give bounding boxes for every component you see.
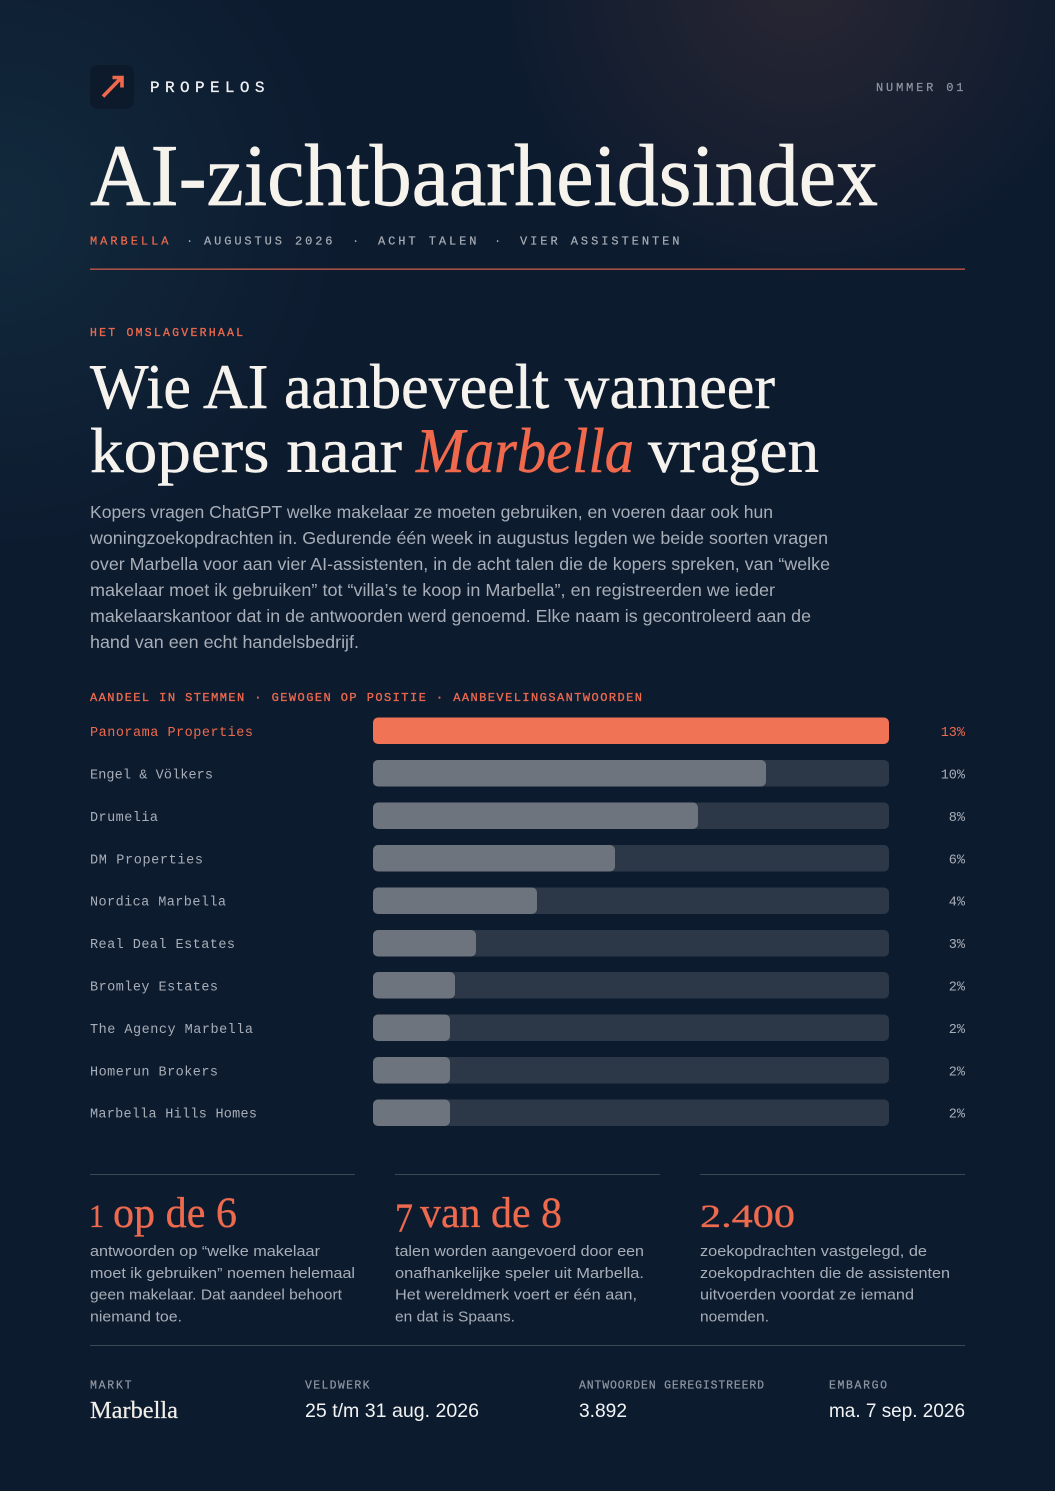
subtitle strip bbox=[90, 234, 680, 248]
stat: 2.400: 2.400 bbox=[700, 1199, 795, 1235]
stat: 7 van de 8: en dat is Spaans. bbox=[395, 1308, 515, 1326]
row: DM Properties bbox=[90, 845, 966, 872]
row: Homerun Brokers: Homerun Brokers bbox=[90, 1066, 218, 1080]
stat: 2.400: uitvoerden voordat ze iemand bbox=[700, 1286, 914, 1304]
footer: embargo: ma. 7 sep. 2026 bbox=[829, 1400, 965, 1422]
row: Bromley Estates: 2% bbox=[949, 980, 966, 996]
footer: fieldwork bbox=[305, 1380, 479, 1422]
stat: 7 van de 8: onafhankelijke speler uit Marbella. bbox=[395, 1265, 644, 1282]
footer: market: Marbella bbox=[90, 1397, 178, 1424]
headline: vragen bbox=[648, 415, 819, 486]
footer: embargo bbox=[829, 1380, 965, 1422]
row: Nordica Marbella bbox=[90, 888, 966, 914]
row: Panorama Properties: Panorama Properties bbox=[90, 726, 253, 741]
headline bbox=[90, 351, 819, 486]
stat: 2.400: zoekopdrachten vastgelegd, de bbox=[700, 1243, 927, 1260]
stat: 1 op de 6: antwoorden op “welke makelaar bbox=[90, 1243, 320, 1260]
stat: 1 op de 6: op de 6 bbox=[113, 1190, 237, 1237]
row: Drumelia bbox=[90, 802, 966, 829]
brand name: PROPELOS bbox=[150, 79, 264, 97]
stat: 7 van de 8: 7 bbox=[395, 1194, 413, 1240]
row: Marbella Hills Homes bbox=[90, 1100, 966, 1126]
intro paragraph: hand van een echt handelsbedrijf. bbox=[90, 632, 359, 652]
masthead bbox=[90, 65, 964, 109]
subtitle strip: · bbox=[186, 234, 193, 248]
row: The Agency Marbella bbox=[90, 1014, 966, 1041]
footer: market bbox=[90, 1380, 178, 1424]
intro paragraph: Kopers vragen ChatGPT welke makelaar ze moeten gebruiken, en voeren daar ook hun bbox=[90, 502, 773, 522]
subtitle strip: ACHT TALEN bbox=[378, 234, 476, 248]
row: Nordica Marbella: Nordica Marbella bbox=[90, 896, 226, 910]
row: Real Deal Estates: 3% bbox=[949, 938, 966, 953]
row: DM Properties: 6% bbox=[949, 854, 966, 868]
row: The Agency Marbella: The Agency Marbella bbox=[90, 1023, 253, 1038]
headline: Marbella bbox=[415, 415, 634, 486]
stat: 1 op de 6: moet ik gebruiken” noemen helemaal bbox=[90, 1265, 355, 1282]
bar chart bbox=[90, 718, 966, 1126]
subtitle strip: · bbox=[352, 234, 359, 248]
row: Bromley Estates: Bromley Estates bbox=[90, 980, 218, 996]
chart heading: AANDEEL IN STEMMEN · GEWOGEN OP POSITIE · AANBEVELINGSANTWOORDEN bbox=[90, 691, 642, 705]
stat: 7 van de 8: Het wereldmerk voert er één aan, bbox=[395, 1286, 637, 1304]
footer: embargo: EMBARGO bbox=[829, 1380, 887, 1392]
row: The Agency Marbella: 2% bbox=[949, 1023, 966, 1038]
row: Engel & Völkers: Engel & Völkers bbox=[90, 768, 213, 784]
row: Bromley Estates bbox=[90, 972, 966, 998]
icon: arrow logo bbox=[90, 65, 134, 109]
issue number: NUMMER 01 bbox=[876, 81, 964, 95]
row: Marbella Hills Homes: Marbella Hills Homes bbox=[90, 1108, 257, 1122]
row: Homerun Brokers bbox=[90, 1057, 966, 1084]
row: Engel & Völkers bbox=[90, 760, 966, 786]
stat: 2.400: zoekopdrachten die de assistenten bbox=[700, 1265, 950, 1282]
intro paragraph bbox=[89, 502, 830, 652]
footer: answers registered bbox=[579, 1380, 764, 1422]
headline: kopers naar bbox=[90, 415, 402, 486]
stat: 7 van de 8: talen worden aangevoerd door een bbox=[395, 1243, 644, 1260]
stat: 2.400 bbox=[700, 1199, 950, 1326]
row: Drumelia: Drumelia bbox=[90, 811, 158, 826]
row: Panorama Properties: 13% bbox=[941, 726, 966, 741]
kicker: HET OMSLAGVERHAAL bbox=[90, 327, 243, 340]
title: AI-zichtbaarheidsindex bbox=[90, 128, 878, 225]
intro paragraph: makelaar moet ik gebruiken” tot “villa’s te koop in Marbella”, en registreerden we ieder bbox=[90, 580, 775, 600]
footer: answers registered: ANTWOORDEN GEREGISTREERD bbox=[579, 1380, 764, 1392]
stat: 7 van de 8: van de 8 bbox=[420, 1190, 562, 1237]
subtitle strip: VIER ASSISTENTEN bbox=[520, 234, 680, 248]
row: Marbella Hills Homes: 2% bbox=[949, 1108, 966, 1122]
row: DM Properties: DM Properties bbox=[90, 854, 203, 868]
row: Nordica Marbella: 4% bbox=[949, 896, 966, 910]
intro paragraph: over Marbella voor aan vier AI-assistenten, in de acht talen die de kopers spreken, van “welke bbox=[90, 554, 830, 574]
subtitle strip: MARBELLA bbox=[90, 234, 169, 248]
subtitle strip: AUGUSTUS 2026 bbox=[204, 234, 332, 248]
stat: 1 op de 6 bbox=[89, 1190, 355, 1326]
row: Drumelia: 8% bbox=[949, 811, 966, 826]
subtitle strip: · bbox=[494, 234, 501, 248]
row: Real Deal Estates: Real Deal Estates bbox=[90, 938, 235, 953]
row: Panorama Properties bbox=[90, 718, 966, 744]
stat: 1 op de 6: geen makelaar. Dat aandeel behoort bbox=[90, 1286, 343, 1304]
headline: Wie AI aanbeveelt wanneer bbox=[90, 351, 775, 422]
intro paragraph: makelaarskantoor dat in de antwoorden werd genoemd. Elke naam is gecontroleerd aan de bbox=[90, 606, 811, 626]
footer: market: MARKT bbox=[90, 1380, 132, 1392]
stat: 1 op de 6: niemand toe. bbox=[90, 1308, 182, 1326]
footer: answers registered: 3.892 bbox=[579, 1400, 627, 1422]
footer: fieldwork: 25 t/m 31 aug. 2026 bbox=[305, 1400, 479, 1422]
row: Real Deal Estates bbox=[90, 930, 966, 956]
intro paragraph: woningzoekopdrachten in. Gedurende één week in augustus legden we beide soorten vragen bbox=[89, 528, 828, 548]
stat: 7 van de 8 bbox=[395, 1190, 644, 1326]
stat: 2.400: noemden. bbox=[700, 1308, 769, 1326]
row: Engel & Völkers: 10% bbox=[941, 768, 966, 784]
row: Homerun Brokers: 2% bbox=[949, 1066, 966, 1080]
stat: 1 op de 6: 1 bbox=[89, 1199, 104, 1235]
footer: fieldwork: VELDWERK bbox=[305, 1380, 370, 1392]
